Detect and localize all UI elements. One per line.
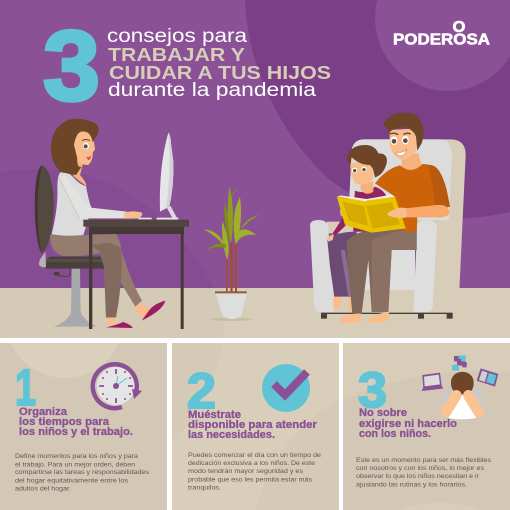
panel 1: organiza <box>0 343 167 510</box>
panel 2 body text: Puedes comenzar el día con un tiempo de <box>188 452 322 459</box>
panel 2 heading <box>188 409 318 441</box>
panel 3 heading <box>359 407 457 440</box>
hero background <box>0 0 510 338</box>
panel 1 body text: compartirse las tareas y responsabilidades <box>15 469 149 476</box>
panel 2 heading: las necesidades. <box>188 429 275 441</box>
panel 3 body text: Este es un momento para ser más flexibles <box>356 457 491 464</box>
panel 1 number: 1 <box>15 359 36 416</box>
panel 2 number: 2 <box>187 363 216 419</box>
panel 1 heading <box>19 406 133 438</box>
puzzle pieces <box>452 355 467 371</box>
icon: clock with arrow <box>93 364 142 408</box>
panel 1 body text: Define momentos para los niños y para <box>15 453 139 460</box>
desk with computer <box>83 133 189 329</box>
panel 1 heading: los niños y el trabajo. <box>19 426 133 438</box>
panel 3: no sobre exigirse <box>343 343 510 510</box>
panel 2 body text <box>188 452 322 492</box>
office chair <box>35 165 105 327</box>
daughter <box>327 145 387 312</box>
illustration: father and daughter reading in armchair <box>310 113 466 323</box>
panel 2 body text: modo tendrán mayor seguridad y es <box>188 468 303 475</box>
panel 2 heading: disponible para atender <box>188 419 318 431</box>
panel 2 body text: dedicación exclusiva a los niños. De este <box>188 460 316 467</box>
panel 1 body text: el trabajo. Para un mejor orden, deben <box>15 462 136 468</box>
title <box>43 10 331 121</box>
panel 2 body text: probable que eso les permita estar más <box>188 476 312 484</box>
panel 3 heading: exigirse ni hacerlo <box>359 418 457 430</box>
stressed person <box>441 372 484 419</box>
illustration: woman working at desk <box>35 119 189 329</box>
panel 3 body text <box>356 457 491 488</box>
panel 1 body text: adultos del hogar. <box>15 486 71 492</box>
panel 3 body text: ajustando las rutinas y los horarios. <box>356 482 467 488</box>
panel 2 background <box>172 343 339 510</box>
logo: O <box>452 19 466 36</box>
woman figure <box>50 119 165 328</box>
panel 1 heading: los tiempos para <box>19 416 110 428</box>
open book <box>477 368 498 387</box>
logo <box>393 19 490 48</box>
panel 2 heading: Muéstrate <box>188 409 241 421</box>
panel 3 heading: con los niños. <box>359 428 431 440</box>
title line: consejos para: consejos para <box>107 26 248 47</box>
logo: PODEROSA <box>393 32 490 48</box>
armchair <box>310 139 466 319</box>
panel 3 background <box>343 343 510 510</box>
panel 1 background <box>0 343 167 510</box>
big number 3: 3 <box>43 10 100 121</box>
title line: trabajar y: TRABAJAR Y <box>108 44 246 65</box>
father <box>339 113 450 323</box>
panel 2 body text: tranquilos. <box>188 484 221 492</box>
icon: overwhelmed person with laptop, puzzle and book <box>422 355 498 419</box>
panel 3 number: 3 <box>358 362 387 418</box>
open book <box>337 195 407 233</box>
title line: durante la pandemia: durante la pandemia <box>108 80 317 101</box>
potted plant <box>204 186 260 321</box>
panel 3 body text: con nosotros y con los niños, lo mejor es <box>356 465 484 472</box>
panel 2: muestrate disponible <box>172 343 339 510</box>
laptop <box>422 373 443 391</box>
title line: cuidar a tus hijos: CUIDAR A TUS HIJOS <box>109 62 331 83</box>
panel 1 heading: Organiza <box>19 406 68 418</box>
icon: check mark <box>262 364 310 412</box>
panel 3 heading: No sobre <box>359 407 407 419</box>
panel 1 body text: del hogar equitativamente entre los <box>15 478 128 484</box>
panel 3 body text: observar lo que los niños necesitan e ir <box>356 473 479 480</box>
panel 1 body text <box>15 453 149 492</box>
